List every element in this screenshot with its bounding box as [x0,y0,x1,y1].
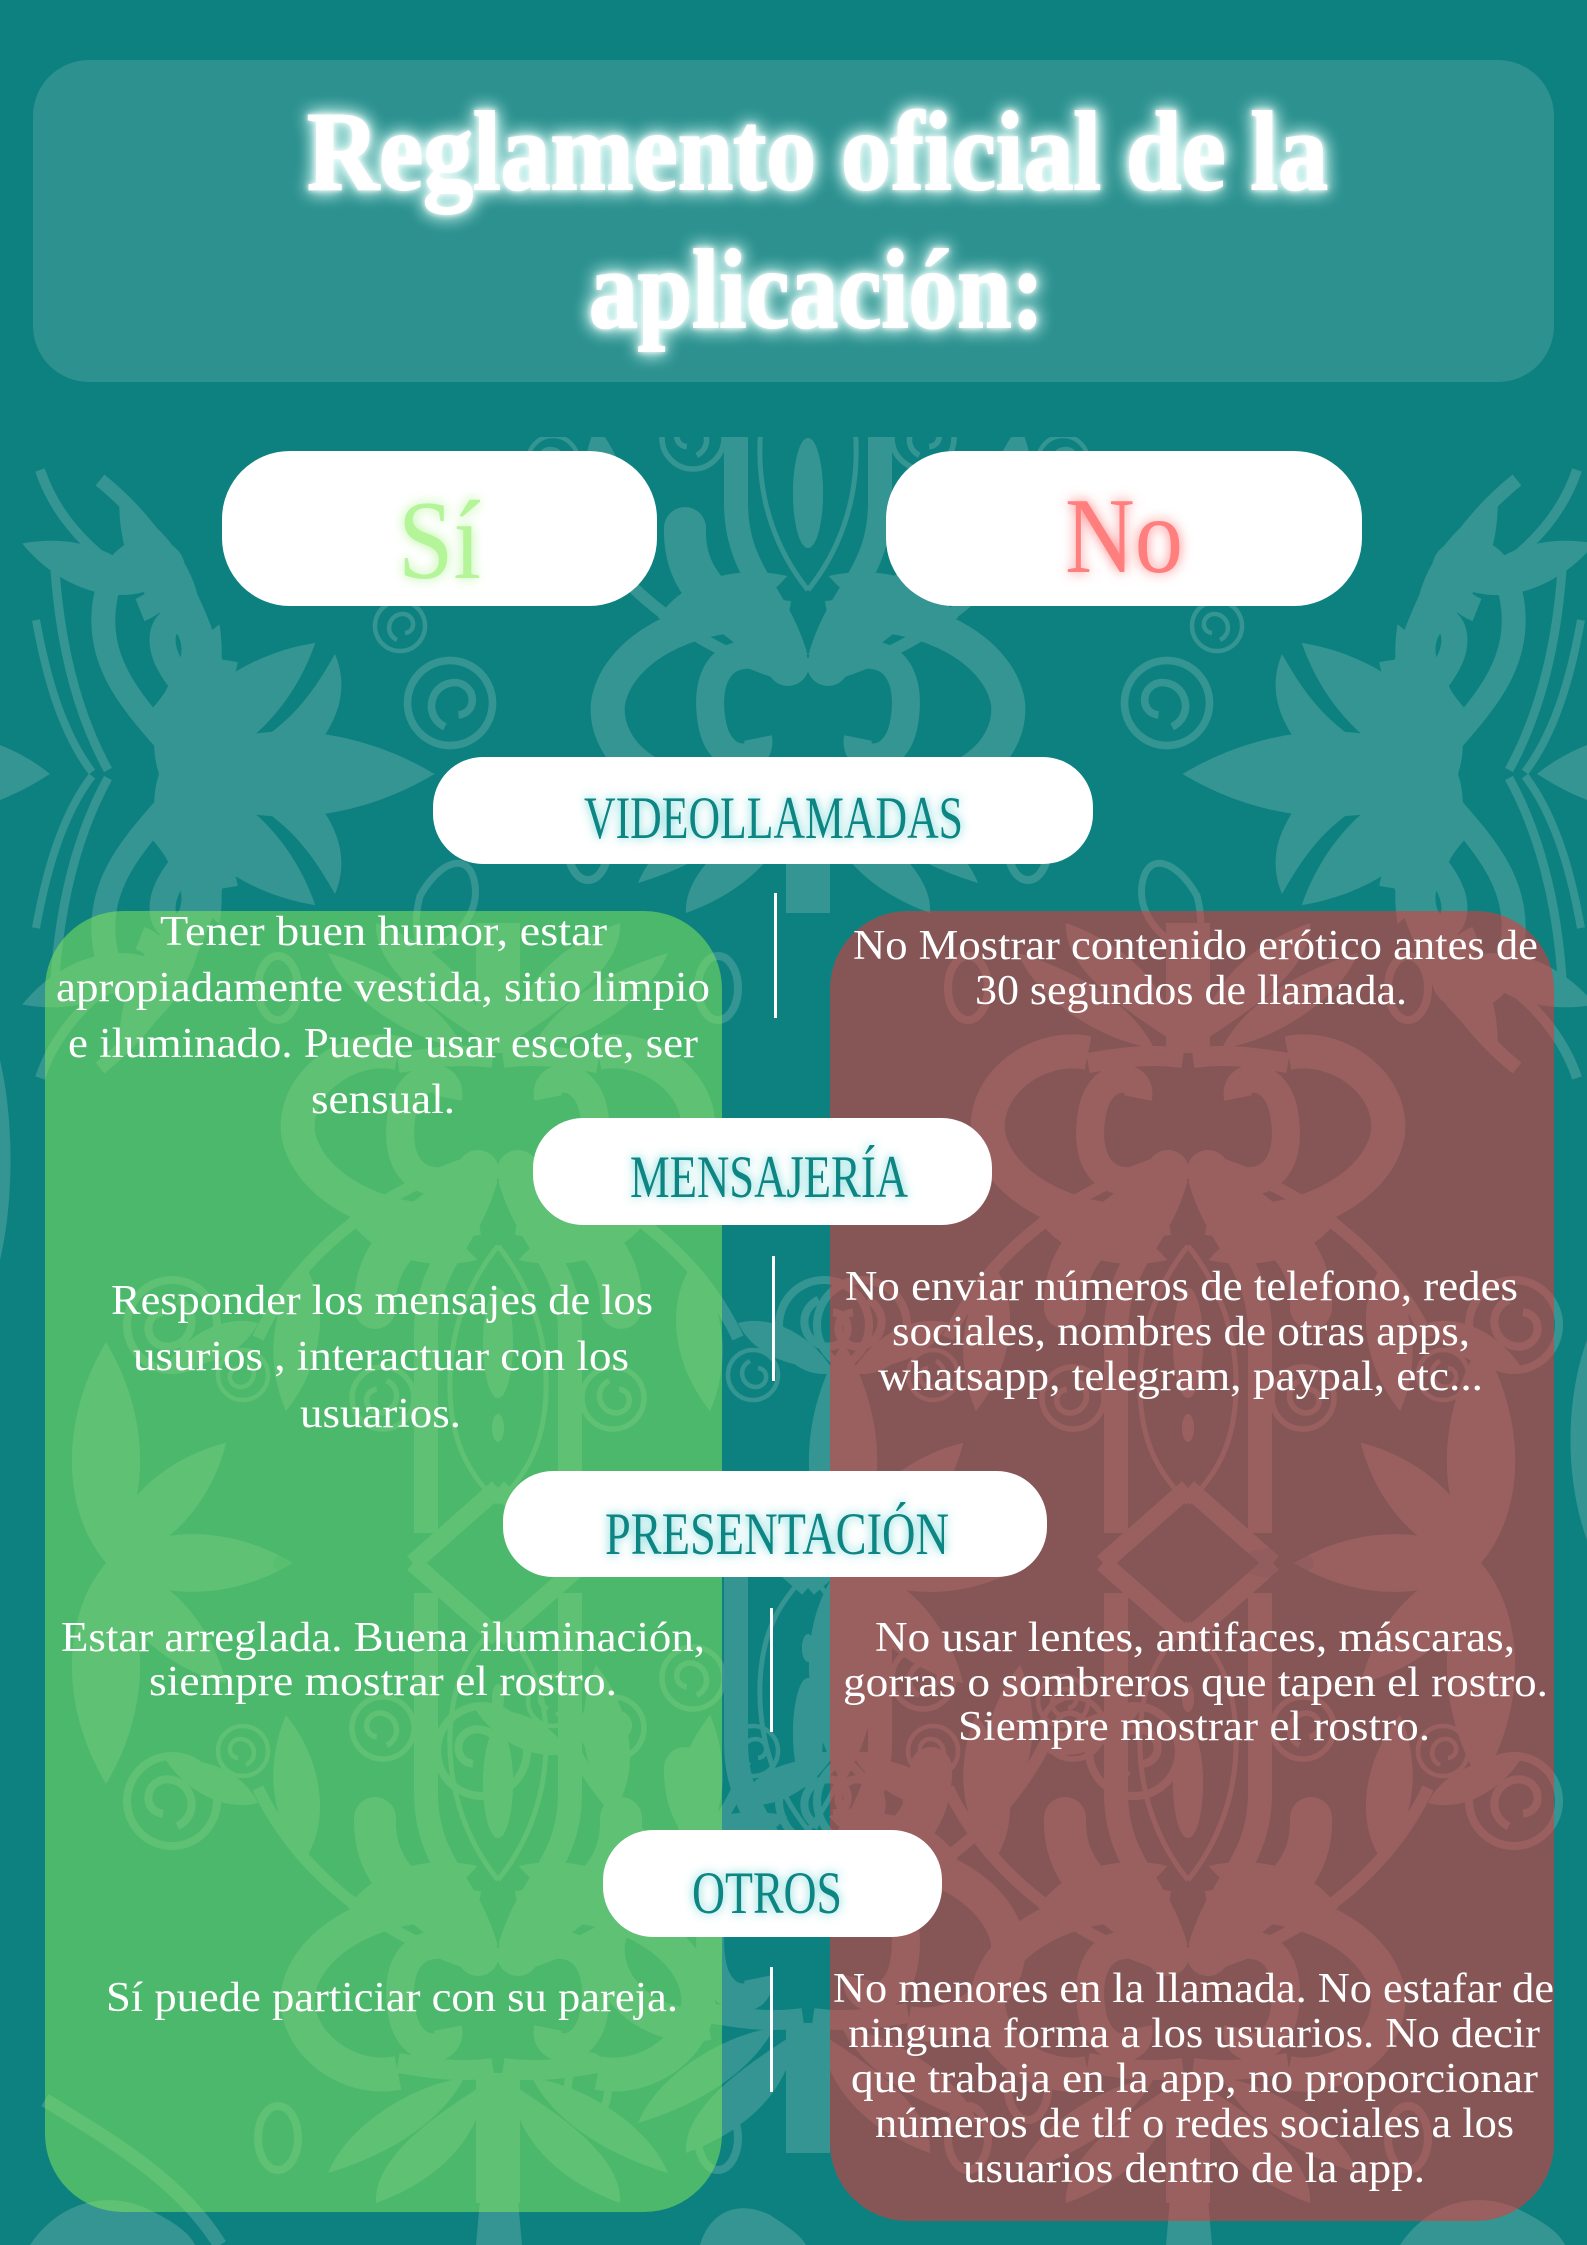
text: mensajería sí [111,1278,653,1437]
text: otros no: ninguna forma a los usuarios. No decir [848,2011,1540,2057]
text: otros no [833,1966,1554,2192]
sí pill [222,451,657,606]
divider: mensajería [772,1256,775,1381]
title panel [33,60,1554,382]
text: videollamadas sí: e iluminado. Puede usar escote, ser [68,1021,698,1067]
heading: presentación: PRESENTACIÓN [605,1501,949,1567]
text: presentación sí: Estar arreglada. Buena iluminación, [61,1615,705,1661]
divider: videollamadas [774,893,777,1018]
text: videollamadas no [853,923,1538,1014]
heading: mensajería: MENSAJERÍA [630,1144,908,1210]
text: videollamadas sí: Tener buen humor, estar [160,909,607,955]
text: mensajería sí: usurios , interactuar con los [133,1334,629,1380]
heading: otros [603,1830,942,1937]
text: mensajería sí: usuarios. [300,1391,461,1437]
text: otros no: No menores en la llamada. No estafar de [833,1966,1554,2012]
text: otros sí: Sí puede particiar con su pareja. [106,1975,678,2021]
text: videollamadas sí: apropiadamente vestida, sitio limpio [56,965,710,1011]
title [307,90,1328,352]
heading: mensajería [533,1118,992,1225]
text: presentación no: Siempre mostrar el rostro. [958,1704,1430,1750]
panel: sí (green) [45,911,722,2212]
title: aplicación: [589,228,1044,352]
text: videollamadas no: 30 segundos de llamada. [975,968,1407,1014]
heading: videollamadas: VIDEOLLAMADAS [584,785,963,851]
heading: videollamadas [433,757,1093,864]
text: otros no: que trabaja en la app, no proporcionar [851,2056,1538,2102]
text: otros no: números de tlf o redes sociales a los [875,2101,1514,2147]
text: presentación no: gorras o sombreros que tapen el rostro. [843,1660,1548,1706]
text: videollamadas sí [56,909,710,1123]
text: presentación sí [61,1615,705,1705]
text: mensajería no: sociales, nombres de otras apps, [892,1309,1470,1355]
text: presentación sí: siempre mostrar el rostro. [149,1659,617,1705]
text: presentación no: No usar lentes, antifaces, máscaras, [875,1615,1515,1661]
heading: otros: OTROS [692,1860,842,1926]
text: otros no: usuarios dentro de la app. [963,2146,1425,2192]
text: mensajería no: No enviar números de telefono, redes [845,1264,1518,1310]
panel: no (red) [830,911,1554,2221]
no pill: No [1065,477,1183,596]
text: videollamadas sí: sensual. [311,1077,455,1123]
text: mensajería no [845,1264,1518,1400]
divider: otros [770,1967,773,2092]
title: Reglamento oficial de la [307,90,1328,214]
text: presentación no [843,1615,1548,1750]
no pill [886,451,1362,606]
text: mensajería sí: Responder los mensajes de los [111,1278,653,1324]
divider: presentación [770,1608,773,1732]
sí pill: Sí [398,479,481,603]
text: mensajería no: whatsapp, telegram, paypal, etc... [878,1354,1483,1400]
heading: presentación [503,1471,1047,1577]
text: videollamadas no: No Mostrar contenido erótico antes de [853,923,1538,969]
